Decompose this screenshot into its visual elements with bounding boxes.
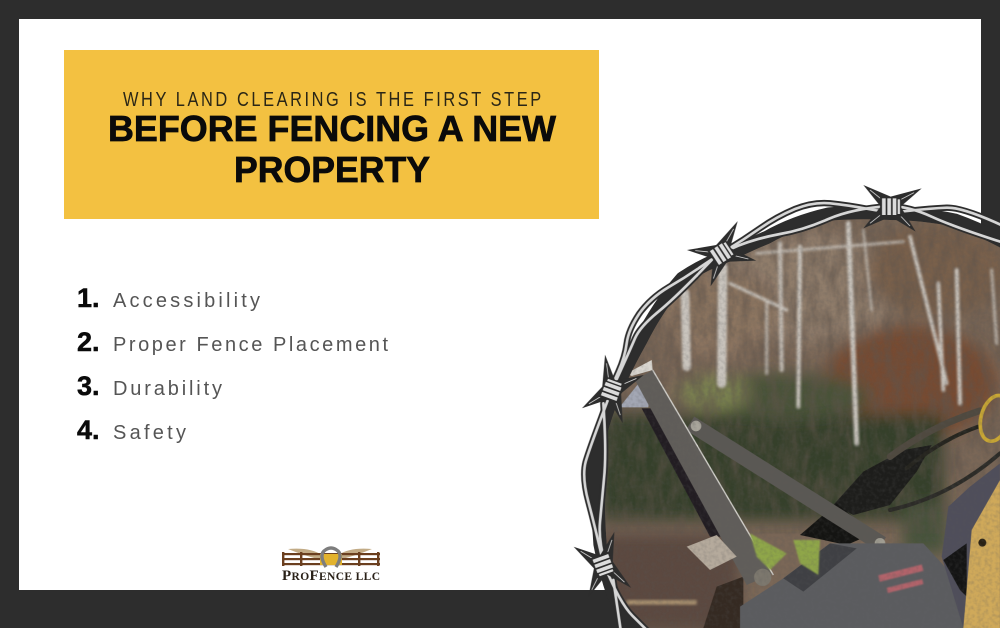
list item 1: 1. — [77, 283, 100, 313]
title banner — [64, 50, 599, 219]
photo: land clearing machine — [605, 219, 1000, 628]
list item 2 — [77, 327, 388, 357]
logo horseshoe — [322, 548, 340, 567]
list item 3 — [77, 371, 222, 401]
photo: dark ground under head — [703, 577, 743, 628]
list item 3: 3. — [77, 371, 100, 401]
title line two: PROPERTY — [234, 149, 430, 190]
photo: arm pins — [691, 421, 701, 431]
list item 4 — [77, 415, 186, 445]
list item 1: Accessibility — [113, 290, 260, 312]
wire strand dark outline — [584, 203, 1000, 628]
list item 4: Safety — [113, 422, 186, 444]
photo: blotchy texture — [600, 217, 1000, 533]
barb: left — [582, 353, 646, 424]
photo background — [605, 219, 1000, 628]
photo: main arm — [635, 370, 772, 585]
photo: hoses — [890, 411, 1000, 510]
photo: ground light strip — [627, 600, 697, 605]
photo: birch trunks — [685, 223, 997, 443]
logo fence — [282, 552, 380, 566]
list item 1 — [77, 283, 260, 313]
photo: metal block — [687, 535, 737, 570]
photo: yellow machine body — [963, 480, 1000, 628]
photo: body bolt hole — [978, 539, 986, 547]
list item 2: Proper Fence Placement — [113, 334, 388, 356]
logo horns — [288, 549, 372, 560]
photo: shadow under arm — [642, 408, 727, 537]
dark ring behind wire — [583, 219, 1000, 628]
photo: machine body shadow — [942, 463, 1000, 628]
numbered list — [77, 283, 388, 445]
photo: long diagonal arm — [690, 423, 882, 544]
photo: upper bracket — [619, 382, 650, 407]
subtitle: WHY LAND CLEARING IS THE FIRST STEP — [123, 87, 541, 110]
photo: cutting head plate — [740, 543, 963, 628]
ProFence logo — [282, 548, 380, 584]
list item 3: Durability — [113, 378, 222, 400]
photo: grain — [600, 217, 1000, 628]
logo wordmark: PROFENCE LLC — [282, 568, 380, 584]
photo: red marking — [878, 564, 923, 593]
wire strand light core — [584, 203, 1000, 628]
title line one: BEFORE FENCING A NEW — [108, 108, 557, 149]
list item 2: 2. — [77, 327, 100, 357]
photo with barbed wire circle — [570, 185, 1000, 628]
barbed wire — [584, 203, 1000, 628]
list item 4: 4. — [77, 415, 100, 445]
photo: soft colour regions — [600, 223, 1000, 628]
barb: lower left — [570, 532, 634, 603]
photo: dark hose mass — [833, 445, 932, 515]
barb: upper left — [687, 218, 761, 289]
logo gold centre — [320, 554, 342, 565]
barb: top — [863, 185, 922, 232]
photo: green debris — [750, 533, 820, 575]
photo: yellow ring — [978, 394, 1000, 443]
